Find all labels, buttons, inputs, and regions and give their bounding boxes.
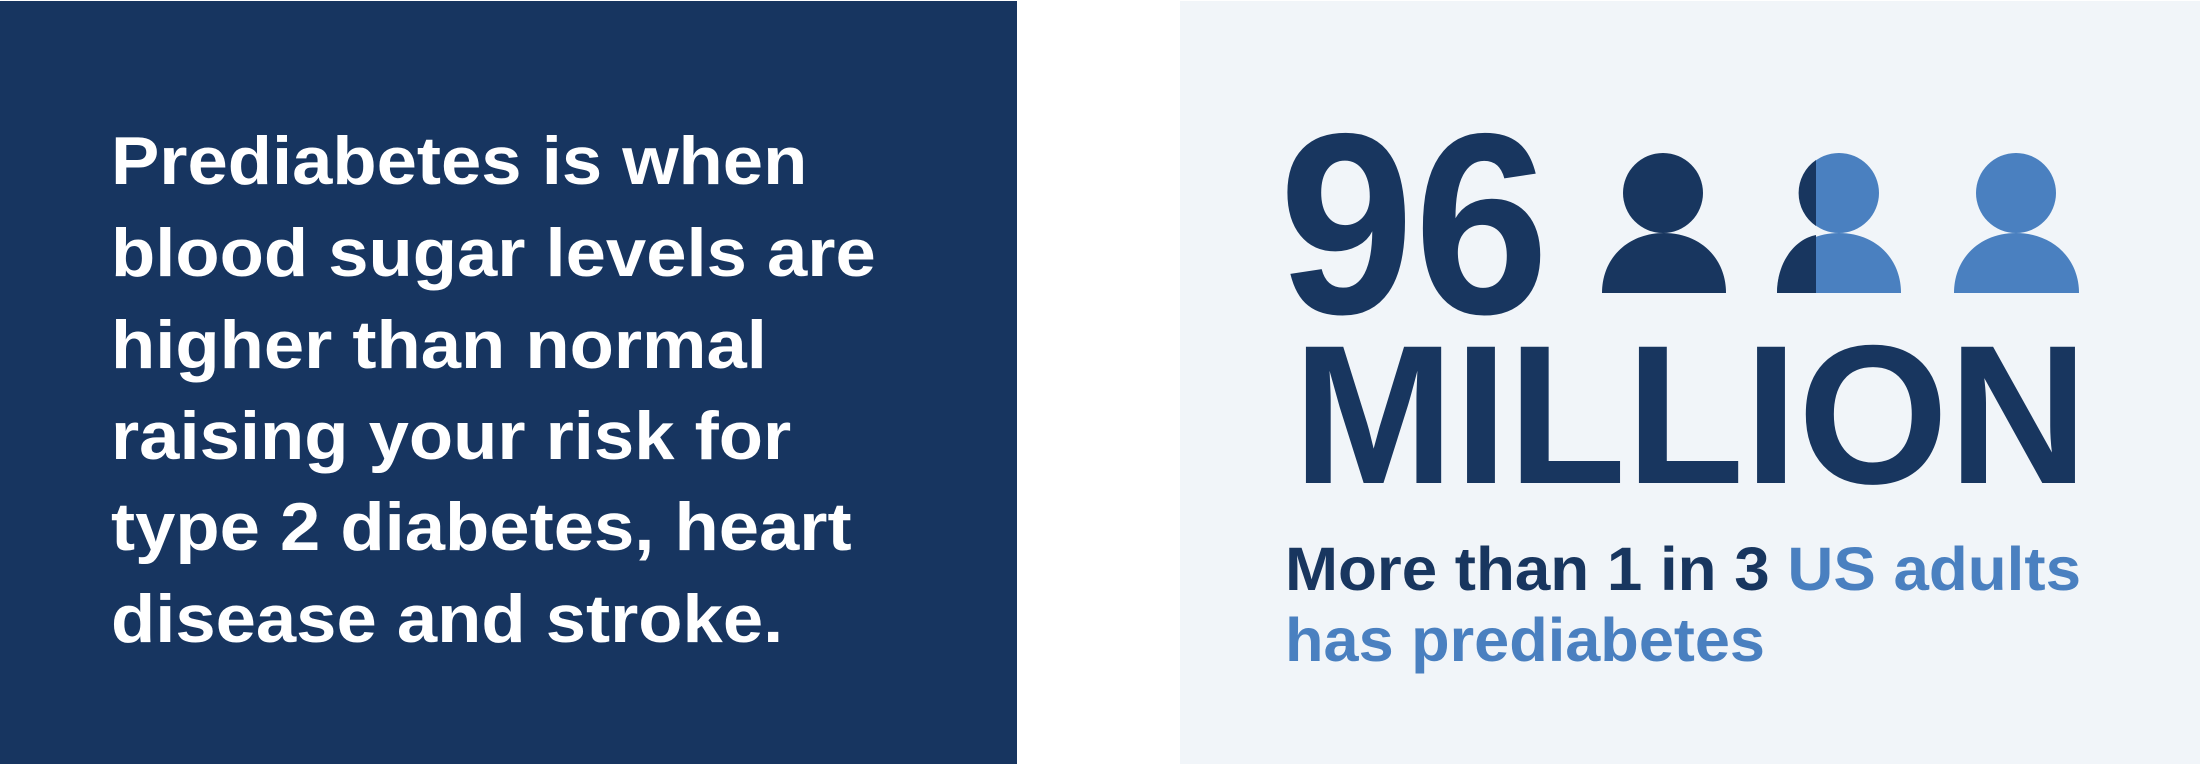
text block: definition — [111, 123, 876, 657]
panel: definition: blood sugar levels are — [111, 215, 876, 291]
big number 96: 96 — [1279, 79, 1549, 368]
panel: definition: type 2 diabetes, heart — [111, 489, 852, 565]
panel: definition: raising your risk for — [111, 398, 791, 474]
caption — [1285, 535, 2081, 674]
caption: has prediabetes — [1285, 606, 1765, 674]
caption: More than 1 in 3 US adults — [1285, 535, 2081, 603]
panel: definition: higher than normal — [111, 307, 767, 383]
icon: person half — [1777, 153, 1901, 293]
panel: definition: disease and stroke. — [111, 581, 783, 657]
heading MILLION: MILLION — [1293, 304, 2088, 525]
icon: person light — [1954, 153, 2079, 293]
icon: person dark — [1602, 153, 1726, 293]
panel: definition: Prediabetes is when — [111, 123, 807, 199]
panel: statistic — [1180, 1, 2200, 764]
panel: definition — [0, 1, 1017, 764]
